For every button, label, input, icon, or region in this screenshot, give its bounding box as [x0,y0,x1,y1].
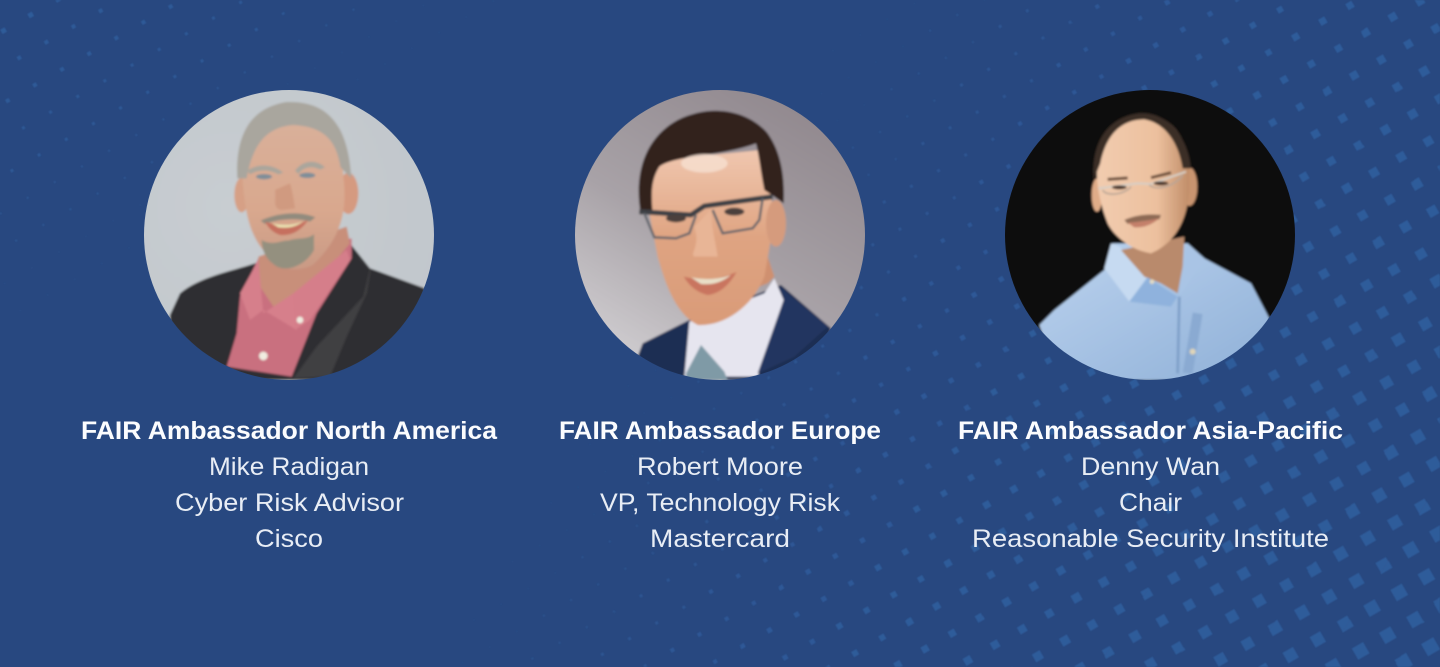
portrait: Denny Wan [1001,87,1301,387]
name: Mike Radigan: Mike Radigan [209,453,369,481]
name: Robert Moore: Robert Moore [637,453,803,481]
company: Reasonable Security Institute: Reasonable Security Institute [972,525,1329,553]
heading: FAIR Ambassador Europe: FAIR Ambassador Europe [559,417,881,445]
heading: FAIR Ambassador Asia-Pacific: FAIR Ambassador Asia-Pacific [958,417,1343,445]
role: Chair: Chair [1119,489,1182,517]
portrait: Robert Moore [571,87,871,387]
role: Cyber Risk Advisor: Cyber Risk Advisor [175,489,404,517]
name: Denny Wan: Denny Wan [1081,453,1220,481]
heading: FAIR Ambassador North America: FAIR Ambassador North America [81,417,498,445]
portrait: Mike Radigan [140,87,440,387]
text block: North America [81,417,498,553]
role: VP, Technology Risk: VP, Technology Risk [600,489,841,517]
company: Cisco: Cisco [255,525,323,553]
company: Mastercard: Mastercard [650,525,790,553]
text block: Asia-Pacific [958,417,1343,553]
text block: Europe [559,417,881,553]
